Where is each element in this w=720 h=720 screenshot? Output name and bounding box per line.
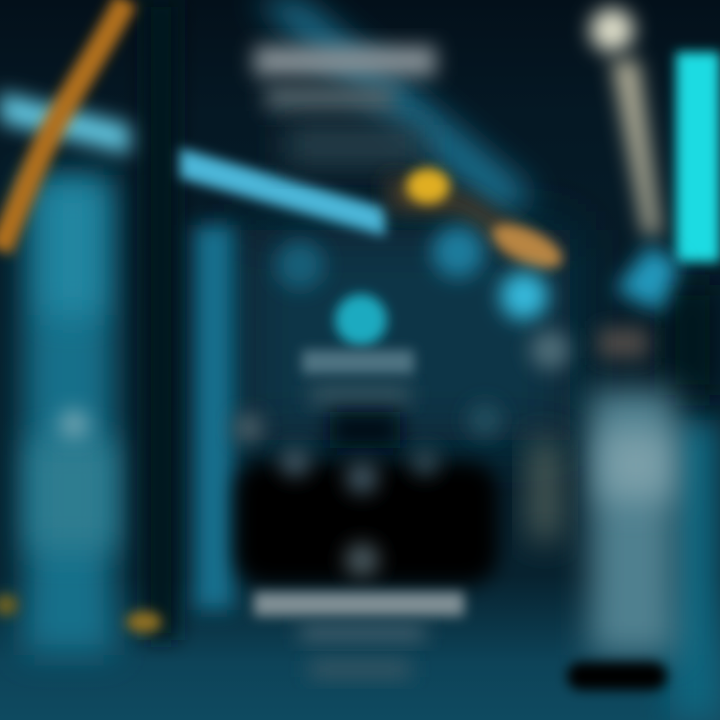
icon: yellow node: [406, 168, 450, 204]
icon: teal centre circle: [335, 294, 387, 346]
panel: left column: [24, 175, 115, 655]
black central panel: [233, 403, 502, 584]
diagonal cyan streak: [255, 0, 535, 215]
dark vertical stripe: [144, 0, 178, 640]
orange curve: [0, 0, 126, 250]
top heading block: [254, 46, 436, 165]
brown connector: [385, 175, 560, 270]
centre label: [302, 350, 414, 405]
bottom caption: [254, 592, 464, 678]
cyan diagonal right: [615, 245, 680, 312]
panel: right column: [530, 328, 676, 655]
cyan band left: [0, 92, 130, 155]
panel: inner left column: [194, 225, 234, 610]
white vertical streak: [590, 8, 660, 235]
cyan band centre: [180, 148, 385, 236]
orange marker bottom left: [0, 594, 162, 633]
circular teal nodes: [276, 226, 570, 370]
bright cyan panel: [676, 52, 720, 262]
black base right: [567, 662, 667, 690]
icon: orange node: [486, 215, 568, 277]
